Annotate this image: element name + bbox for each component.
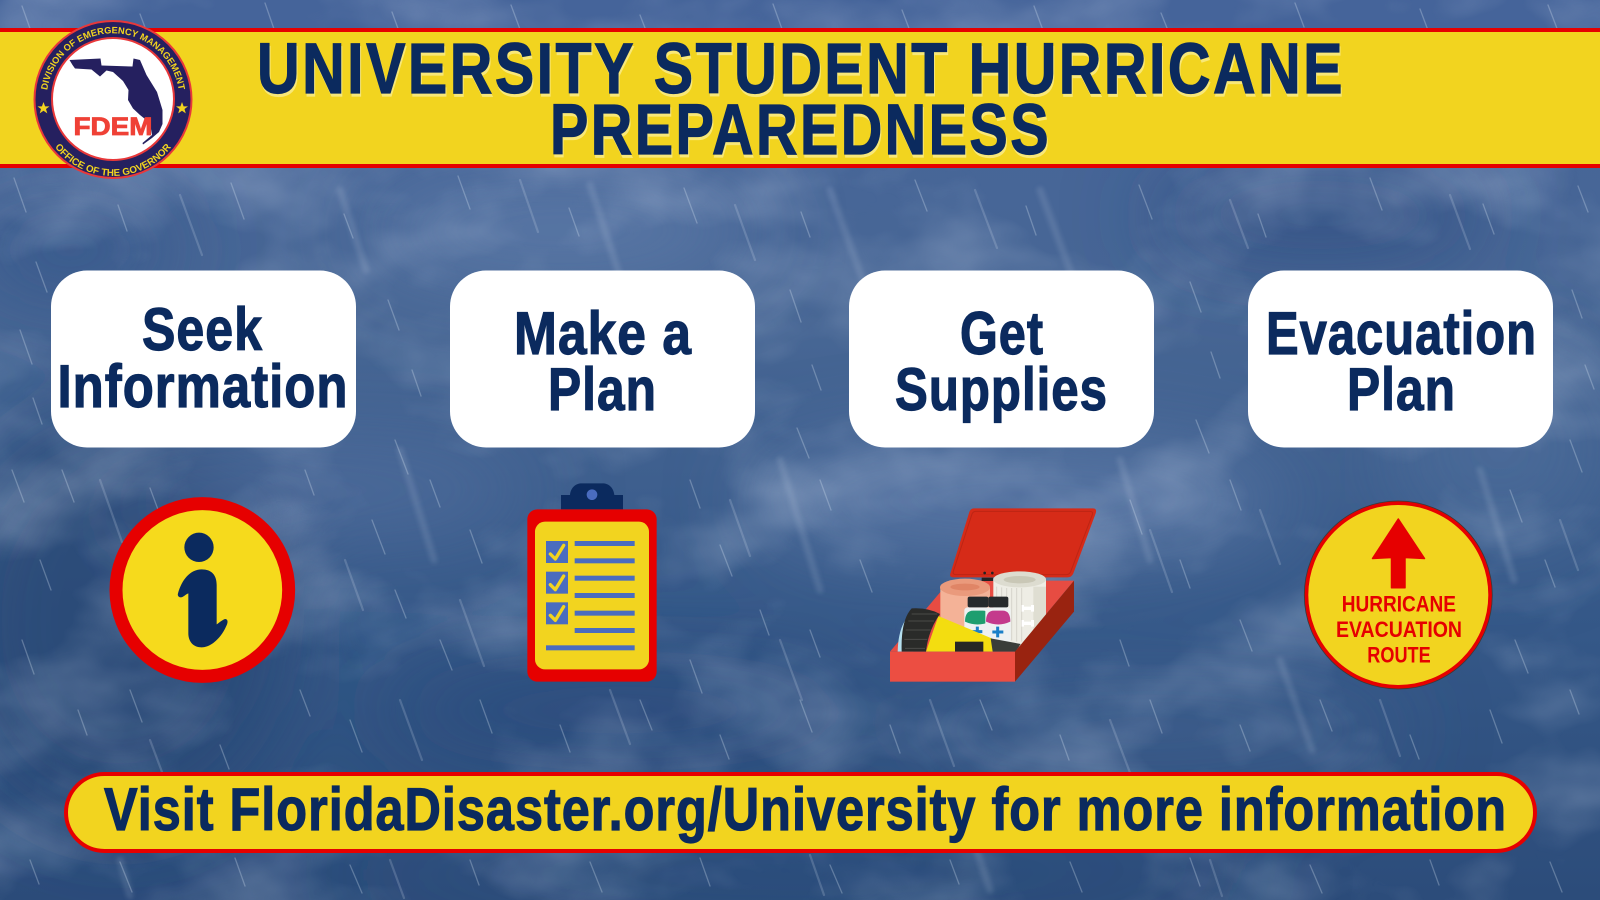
- card: Get Supplies: [849, 270, 1154, 448]
- FDEM wordmark: FDEM: [74, 113, 152, 141]
- card: Make a Plan: [450, 270, 755, 448]
- icon: hurricane evacuation route sign: [1304, 501, 1492, 689]
- icon: hurricane evacuation route sign: HURRICANE: [1342, 592, 1456, 617]
- header banner: [0, 30, 1600, 173]
- logo: FDEM seal: DIVISION OF EMERGENCY MANAGEMENT: [41, 26, 186, 90]
- title: [257, 30, 1346, 173]
- card: Make a Plan: Plan: [548, 356, 657, 423]
- title: PREPAREDNESS: [550, 91, 1051, 170]
- card: Get Supplies: Supplies: [895, 356, 1108, 423]
- card: Seek Information: [51, 270, 356, 448]
- title: PREPAREDNESS: [551, 94, 1052, 173]
- card: Evacuation Plan: [1248, 270, 1553, 448]
- card: Get Supplies: Get: [960, 300, 1044, 367]
- card: Seek Information: Seek: [142, 296, 263, 363]
- icon: emergency supply kit: [890, 508, 1096, 682]
- title: UNIVERSITY STUDENT HURRICANE: [257, 30, 1345, 109]
- icon: hurricane evacuation route sign: EVACUATION: [1336, 617, 1462, 642]
- title: UNIVERSITY STUDENT HURRICANE: [258, 33, 1346, 112]
- icon: clipboard checklist: [527, 483, 657, 682]
- card: Evacuation Plan: Plan: [1347, 356, 1456, 423]
- card: Evacuation Plan: Evacuation: [1266, 300, 1537, 367]
- logo: FDEM seal: [34, 20, 192, 179]
- icon: hurricane evacuation route sign: ROUTE: [1367, 642, 1431, 667]
- card: Make a Plan: Make a: [514, 300, 692, 367]
- card: Seek Information: Information: [58, 353, 348, 420]
- arrow: up: [1372, 519, 1424, 588]
- logo: FDEM seal: OFFICE OF THE GOVERNOR: [56, 144, 172, 176]
- icon: Florida map: [70, 58, 162, 144]
- icon: information symbol: [116, 504, 289, 676]
